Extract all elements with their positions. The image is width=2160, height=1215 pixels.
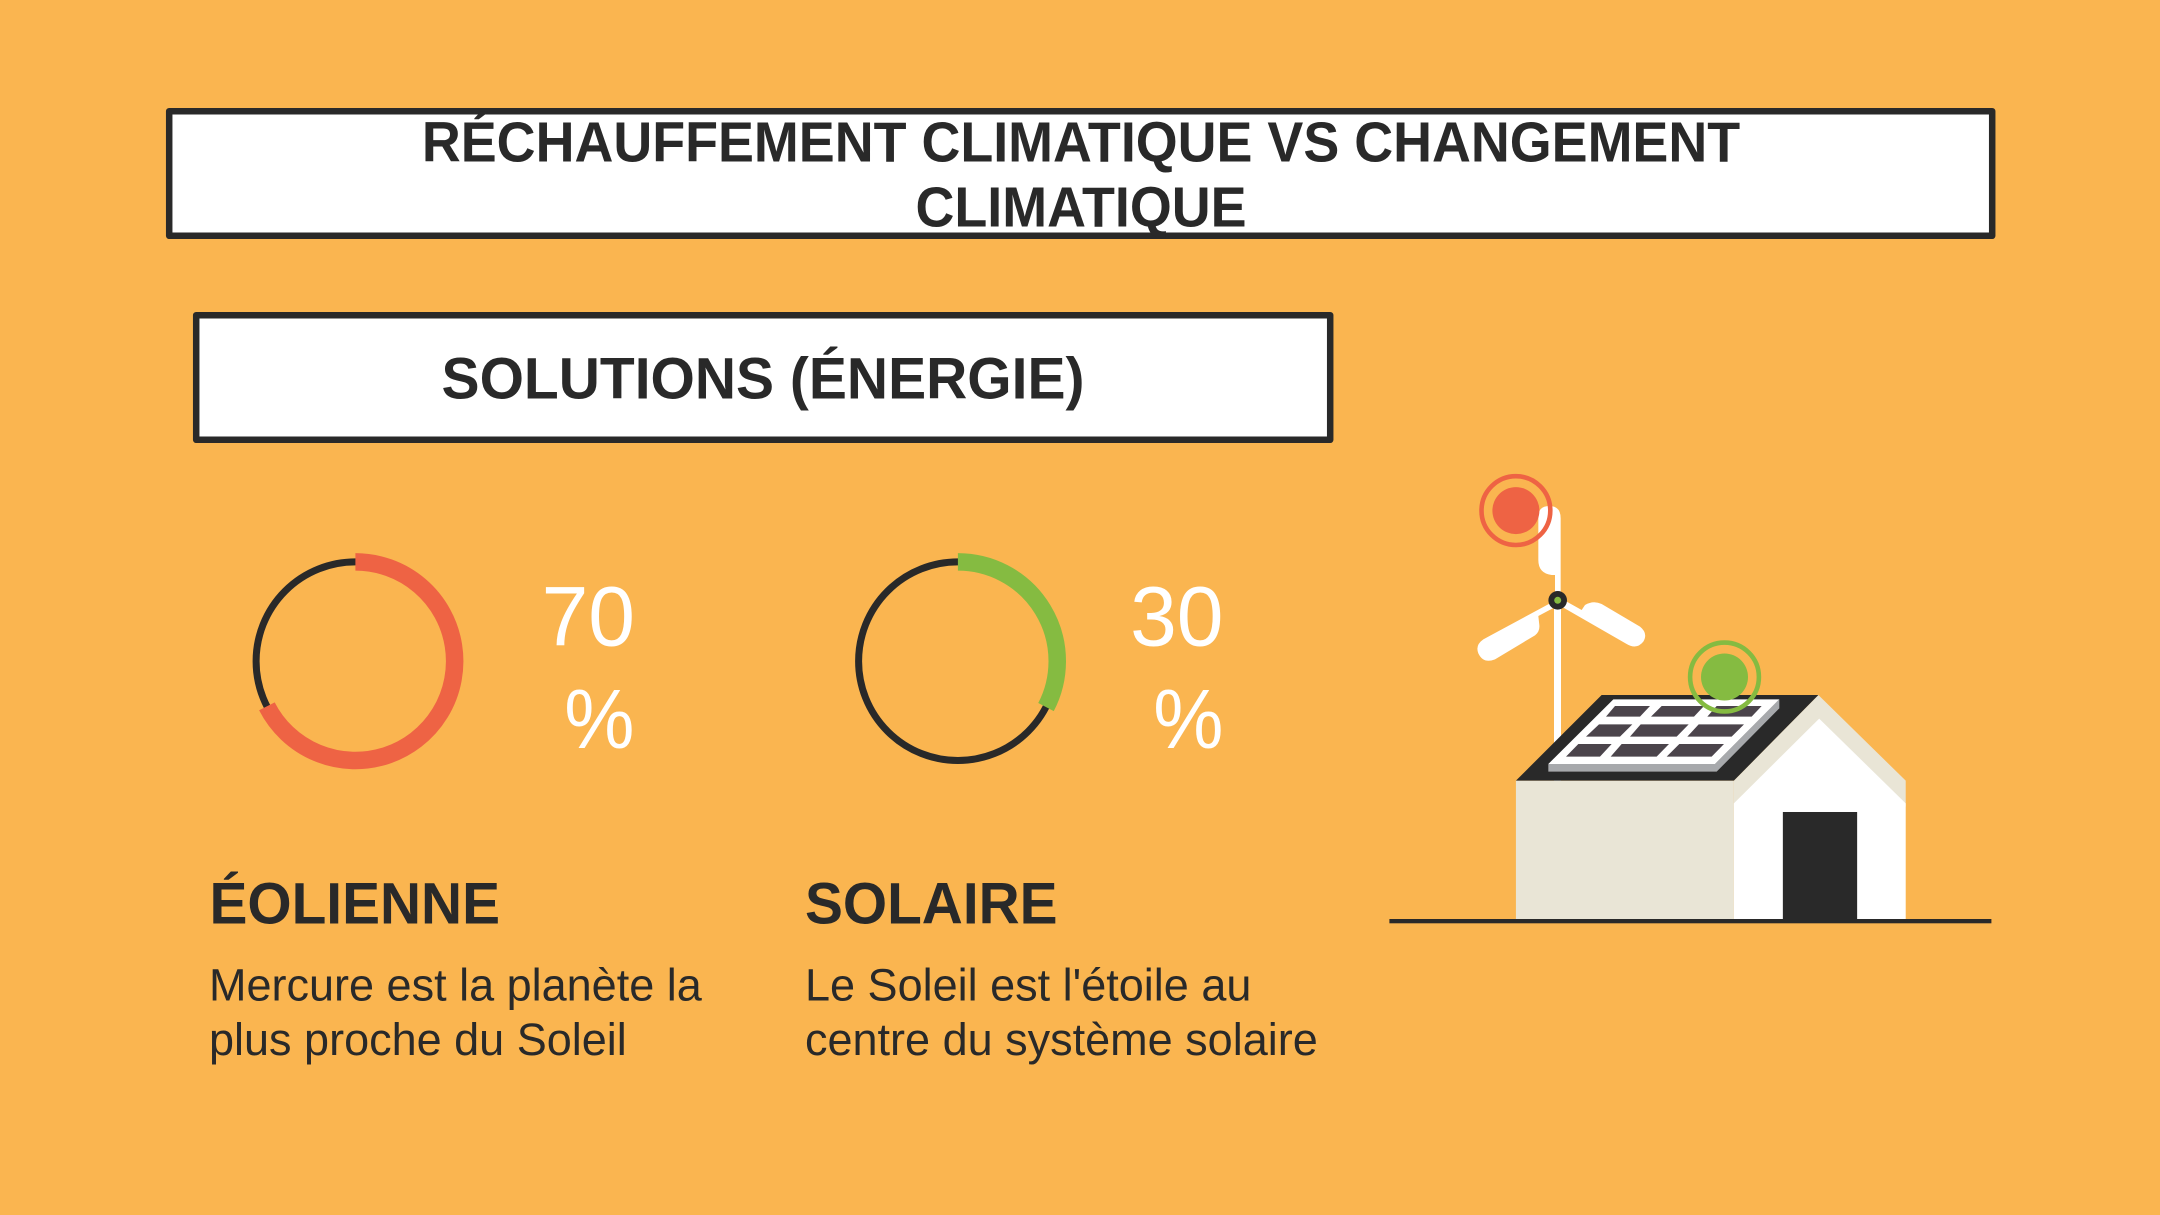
house front	[1734, 719, 1906, 919]
house gable back	[1734, 695, 1906, 807]
title text: CLIMATIQUE	[915, 175, 1247, 239]
donut chart: solaire 30%	[859, 562, 1057, 760]
label: éolienne: ÉOLIENNE	[210, 872, 500, 937]
description: solaire	[805, 960, 1318, 1065]
donut chart: éolienne 70%	[256, 562, 455, 761]
label: solaire: SOLAIRE	[805, 872, 1058, 937]
value: 70 %: 70	[542, 570, 635, 664]
description: éolienne: Mercure est la planète la	[209, 960, 703, 1010]
value: 30 %	[1130, 570, 1224, 767]
description: solaire: centre du système solaire	[805, 1014, 1318, 1065]
value: 70 %: %	[564, 673, 634, 767]
section heading: solutions: SOLUTIONS (ÉNERGIE)	[442, 347, 1084, 411]
value: 30 %: 30	[1130, 570, 1224, 664]
description: éolienne	[209, 960, 703, 1065]
house side wall	[1516, 781, 1734, 919]
title banner	[169, 110, 1992, 239]
icon: wind turbine	[1477, 506, 1645, 790]
solar panel	[1548, 699, 1779, 772]
label: éolienne	[209, 872, 703, 1065]
label: solaire	[805, 872, 1318, 1065]
value: 30 %: %	[1153, 673, 1224, 767]
title text: RÉCHAUFFEMENT CLIMATIQUE VS CHANGEMENT	[422, 110, 1740, 174]
roof	[1516, 695, 1818, 781]
marker: wind turbine	[1482, 476, 1550, 545]
door	[1783, 812, 1857, 919]
ground line	[1389, 919, 1991, 923]
section heading: solutions	[196, 315, 1330, 440]
value: 70 %	[542, 570, 635, 767]
description: solaire: Le Soleil est l'étoile au	[805, 960, 1251, 1010]
title text	[422, 110, 1740, 239]
marker: solar panel	[1690, 643, 1759, 711]
icon: house with solar panel	[1516, 695, 1906, 919]
description: éolienne: plus proche du Soleil	[209, 1014, 627, 1065]
